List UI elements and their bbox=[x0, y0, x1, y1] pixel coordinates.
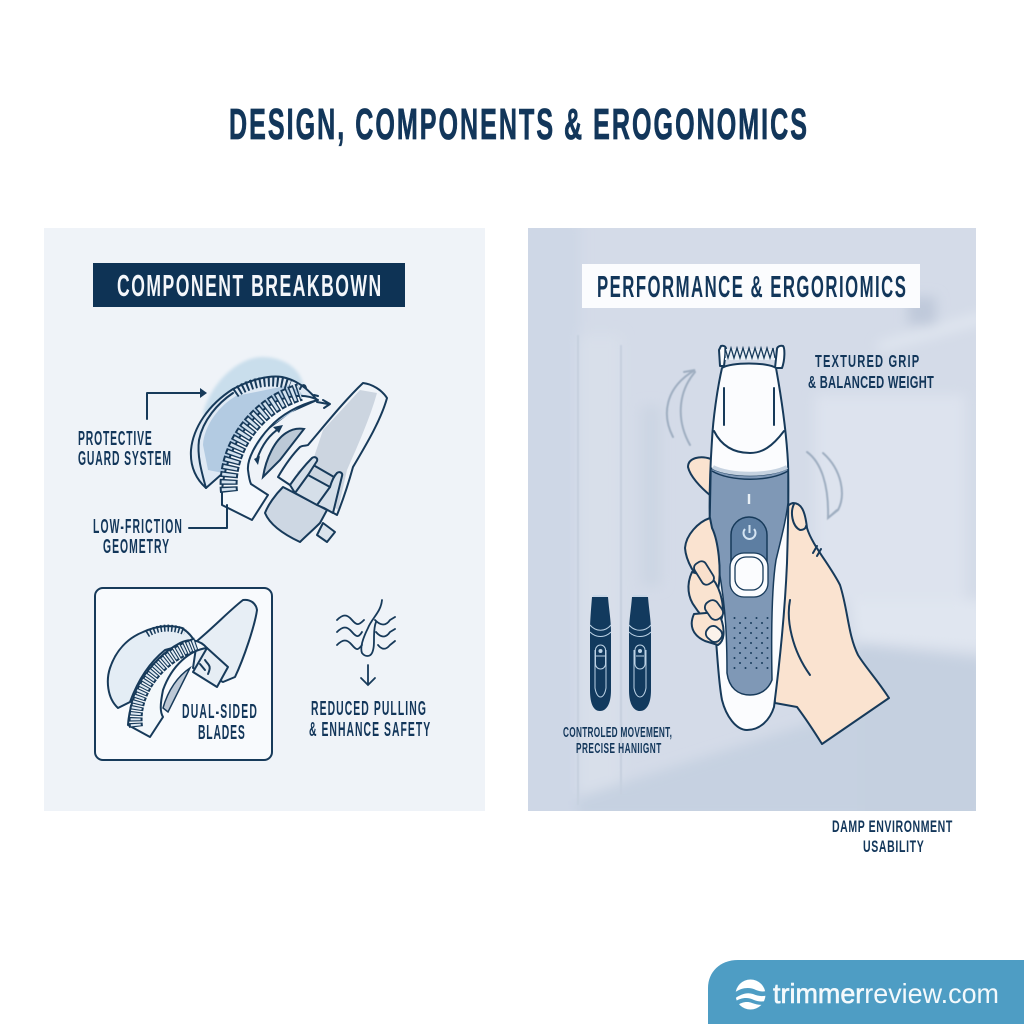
callout: low-friction geometry bbox=[93, 505, 227, 558]
callout: low-friction geometry: LOW-FRICTION bbox=[93, 517, 182, 538]
panel: performance and ergonomics bbox=[520, 220, 985, 820]
heading: component breakbown bbox=[93, 263, 405, 307]
illustration: two small trimmers bbox=[590, 596, 651, 711]
caption: damp environment usability: DAMP ENVIRONMENT bbox=[832, 816, 953, 836]
diagram: exploded guard and blade head bbox=[191, 357, 387, 542]
arrows: rotation motion bbox=[667, 370, 842, 518]
icon: wave globe logo bbox=[734, 980, 768, 1010]
callout: protective guard system: PROTECTIVE bbox=[78, 429, 152, 450]
heading: performance and ergoriomics: PERFORMANCE & ERGORIOMICS bbox=[597, 270, 906, 304]
callout: textured grip and balanced weight bbox=[808, 351, 934, 393]
callout: protective guard system: GUARD SYSTEM bbox=[78, 449, 171, 470]
background: blurred bathroom scene bbox=[520, 220, 985, 820]
callout: protective guard system bbox=[78, 388, 207, 470]
inset: dual-sided blades bbox=[95, 588, 272, 760]
text: reduced pulling and enhance safety: REDUCED PULLING bbox=[311, 699, 426, 720]
inset: dual-sided blades: DUAL-SIDED bbox=[182, 702, 257, 723]
inset: dual-sided blades: BLADES bbox=[198, 723, 245, 744]
illustration: hand behind trimmer bbox=[688, 457, 889, 744]
heading: component breakbown: COMPONENT BREAKBOWN bbox=[117, 269, 381, 303]
panel: component breakdown bbox=[44, 228, 485, 811]
callout: textured grip and balanced weight: & BALANCED WEIGHT bbox=[808, 372, 934, 393]
title: DESIGN, COMPONENTS & EROGONOMICS bbox=[229, 100, 807, 149]
caption: damp environment usability: USABILITY bbox=[863, 836, 924, 856]
icon: hair with reduced pulling arrow bbox=[337, 600, 395, 685]
callout: textured grip and balanced weight: TEXTURED GRIP bbox=[815, 351, 919, 372]
footer badge: trimmerreview.com: trimmerreview.com bbox=[773, 978, 999, 1009]
text: reduced pulling and enhance safety bbox=[309, 699, 430, 741]
caption: controlled movement: PRECISE HANIIGNT bbox=[576, 739, 662, 757]
illustration: fingers gripping trimmer bbox=[685, 504, 821, 675]
illustration: trimmer body bbox=[710, 346, 788, 730]
text: reduced pulling and enhance safety: & ENHANCE SAFETY bbox=[309, 720, 430, 741]
callout: low-friction geometry: GEOMETRY bbox=[103, 537, 169, 558]
caption: controlled movement bbox=[563, 723, 672, 757]
caption: controlled movement: CONTROLED MOVEMENT, bbox=[563, 723, 672, 741]
caption: damp environment usability bbox=[832, 816, 953, 856]
footer badge: trimmerreview.com bbox=[708, 960, 1024, 1024]
